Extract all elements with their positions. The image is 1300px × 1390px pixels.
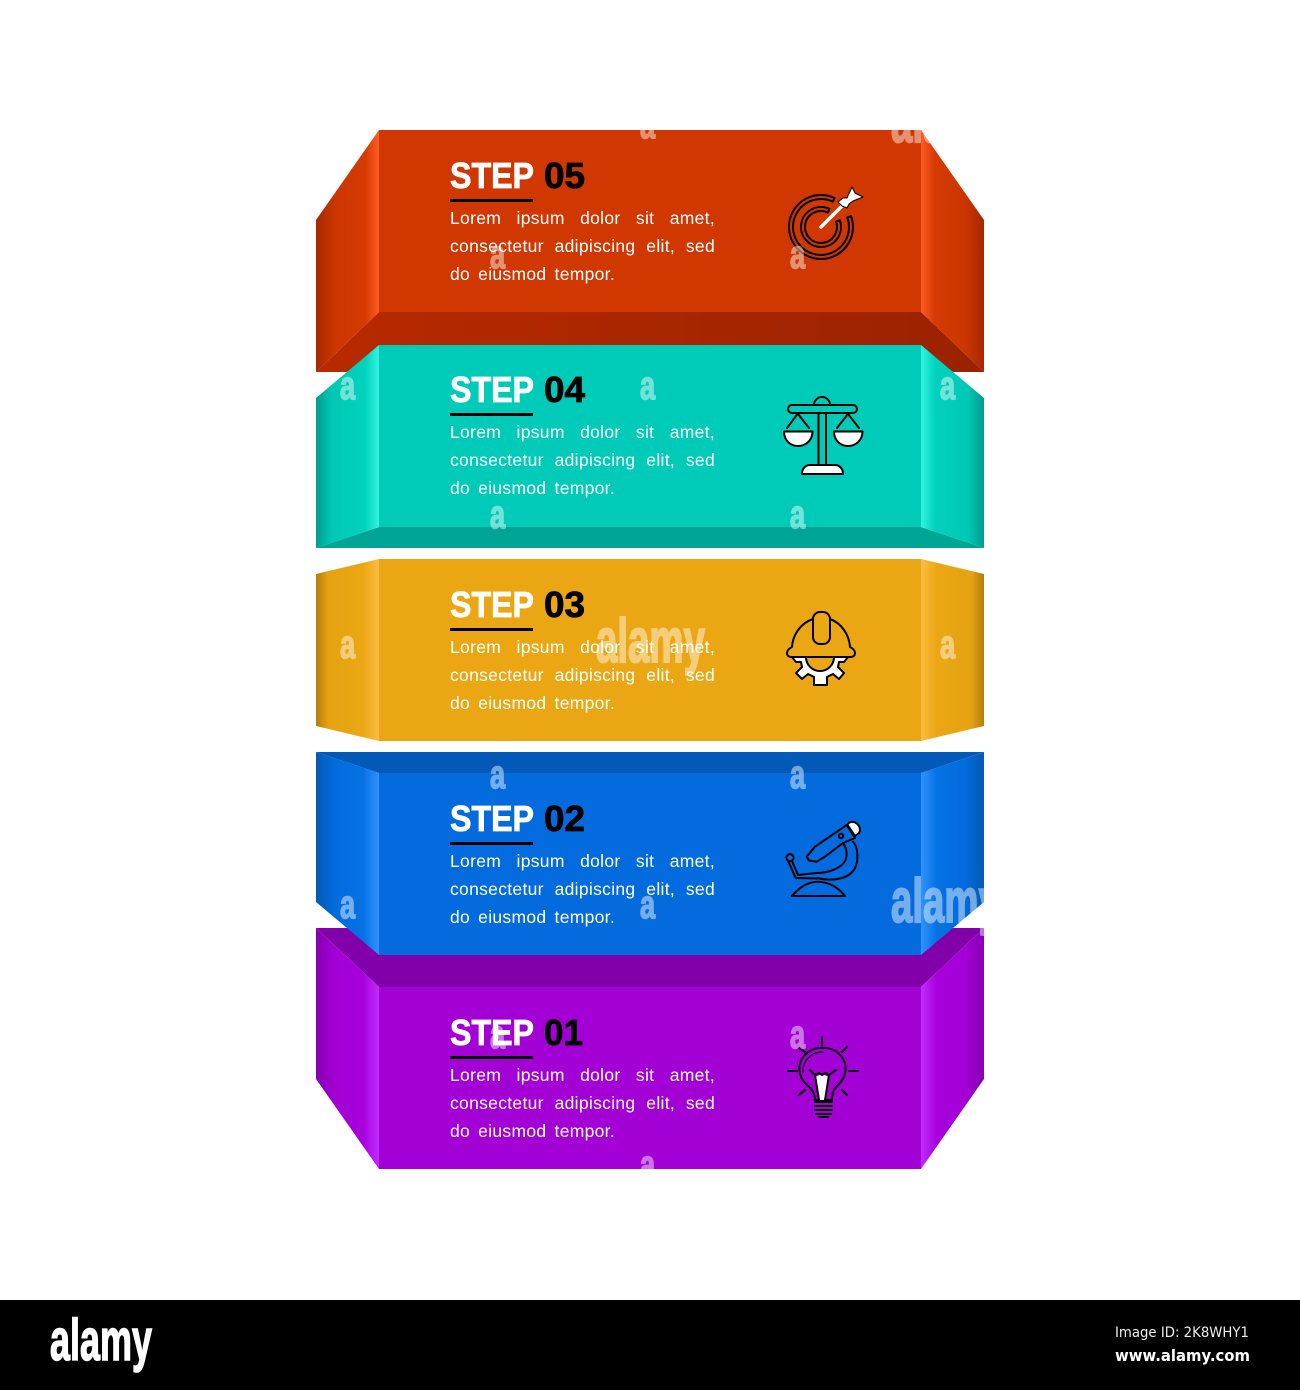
panel: step 02: do eiusmod tempor.	[450, 907, 615, 927]
panel: step 01: Lorem ipsum dolor sit amet,	[450, 1065, 715, 1085]
icon: microscope	[786, 822, 860, 896]
panel: step 04: Lorem ipsum dolor sit amet,	[450, 422, 715, 442]
icon: balance scale	[784, 397, 862, 474]
panel: step 02: 02	[544, 798, 585, 839]
watermark: stock photo marks: a	[790, 1013, 806, 1057]
watermark: stock photo marks: a	[940, 364, 956, 408]
footer bar: www.alamy.com	[1115, 1346, 1250, 1365]
panel: step 01: consectetur adipiscing elit, sed	[450, 1093, 715, 1113]
watermark: stock photo marks: alamy	[891, 86, 1000, 155]
panel: step 01: STEP	[450, 1012, 534, 1053]
icon: target with arrow	[789, 187, 863, 259]
watermark: stock photo marks: a	[790, 753, 806, 797]
watermark: stock photo marks: a	[640, 883, 656, 927]
panel: step 05: do eiusmod tempor.	[450, 264, 615, 284]
watermark: stock photo marks: a	[340, 364, 356, 408]
watermark: stock photo marks: a	[490, 233, 506, 277]
panel: step 04: do eiusmod tempor.	[450, 478, 615, 498]
watermark: stock photo marks: a	[340, 623, 356, 667]
watermark: stock photo marks: a	[640, 364, 656, 408]
watermark: stock photo marks: a	[790, 233, 806, 277]
footer logo: alamy	[50, 1308, 152, 1373]
watermark: stock photo marks: a	[940, 623, 956, 667]
panel: step 05: consectetur adipiscing elit, sed	[450, 236, 715, 256]
panel: step 02: consectetur adipiscing elit, sed	[450, 879, 715, 899]
panel: step 03	[316, 559, 984, 741]
panel: step 05: STEP	[450, 155, 534, 196]
panel: step 01	[316, 928, 984, 1169]
panel: step 03: Lorem ipsum dolor sit amet,	[450, 637, 715, 657]
watermark: stock photo marks: alamy	[596, 606, 705, 675]
icon: hard hat with gear	[787, 612, 855, 685]
panel: step 02	[316, 752, 984, 955]
watermark: stock photo marks: a	[790, 493, 806, 537]
watermark: stock photo marks: a	[490, 1013, 506, 1057]
watermark: stock photo marks: a	[640, 1143, 656, 1187]
footer bar	[0, 1300, 1300, 1390]
icon: light bulb	[788, 1037, 858, 1117]
watermark: stock photo marks: a	[490, 493, 506, 537]
watermark: stock photo marks: a	[340, 883, 356, 927]
panel: step 04	[316, 345, 984, 548]
panel: step 03: STEP	[450, 584, 534, 625]
panel: step 05	[316, 130, 984, 372]
panel: step 02: Lorem ipsum dolor sit amet,	[450, 851, 715, 871]
panel: step 05: Lorem ipsum dolor sit amet,	[450, 208, 715, 228]
panel: step 03: consectetur adipiscing elit, sed	[450, 665, 715, 685]
panel: step 01: do eiusmod tempor.	[450, 1121, 615, 1141]
panel: step 03: do eiusmod tempor.	[450, 693, 615, 713]
panel: step 04: STEP	[450, 369, 534, 410]
panel: step 02: STEP	[450, 798, 534, 839]
watermark: stock photo marks: alamy	[891, 866, 1000, 935]
watermark: stock photo marks: a	[640, 103, 656, 147]
watermark: stock photo marks	[340, 86, 1105, 1187]
watermark: stock photo marks: a	[490, 753, 506, 797]
panel: step 04: consectetur adipiscing elit, sed	[450, 450, 715, 470]
panel: step 01: 01	[544, 1012, 583, 1053]
footer bar: Image ID: 2K8WHY1	[1115, 1325, 1249, 1341]
panel: step 04: 04	[544, 369, 585, 410]
panel: step 05: 05	[544, 155, 585, 196]
panel: step 03: 03	[544, 584, 585, 625]
